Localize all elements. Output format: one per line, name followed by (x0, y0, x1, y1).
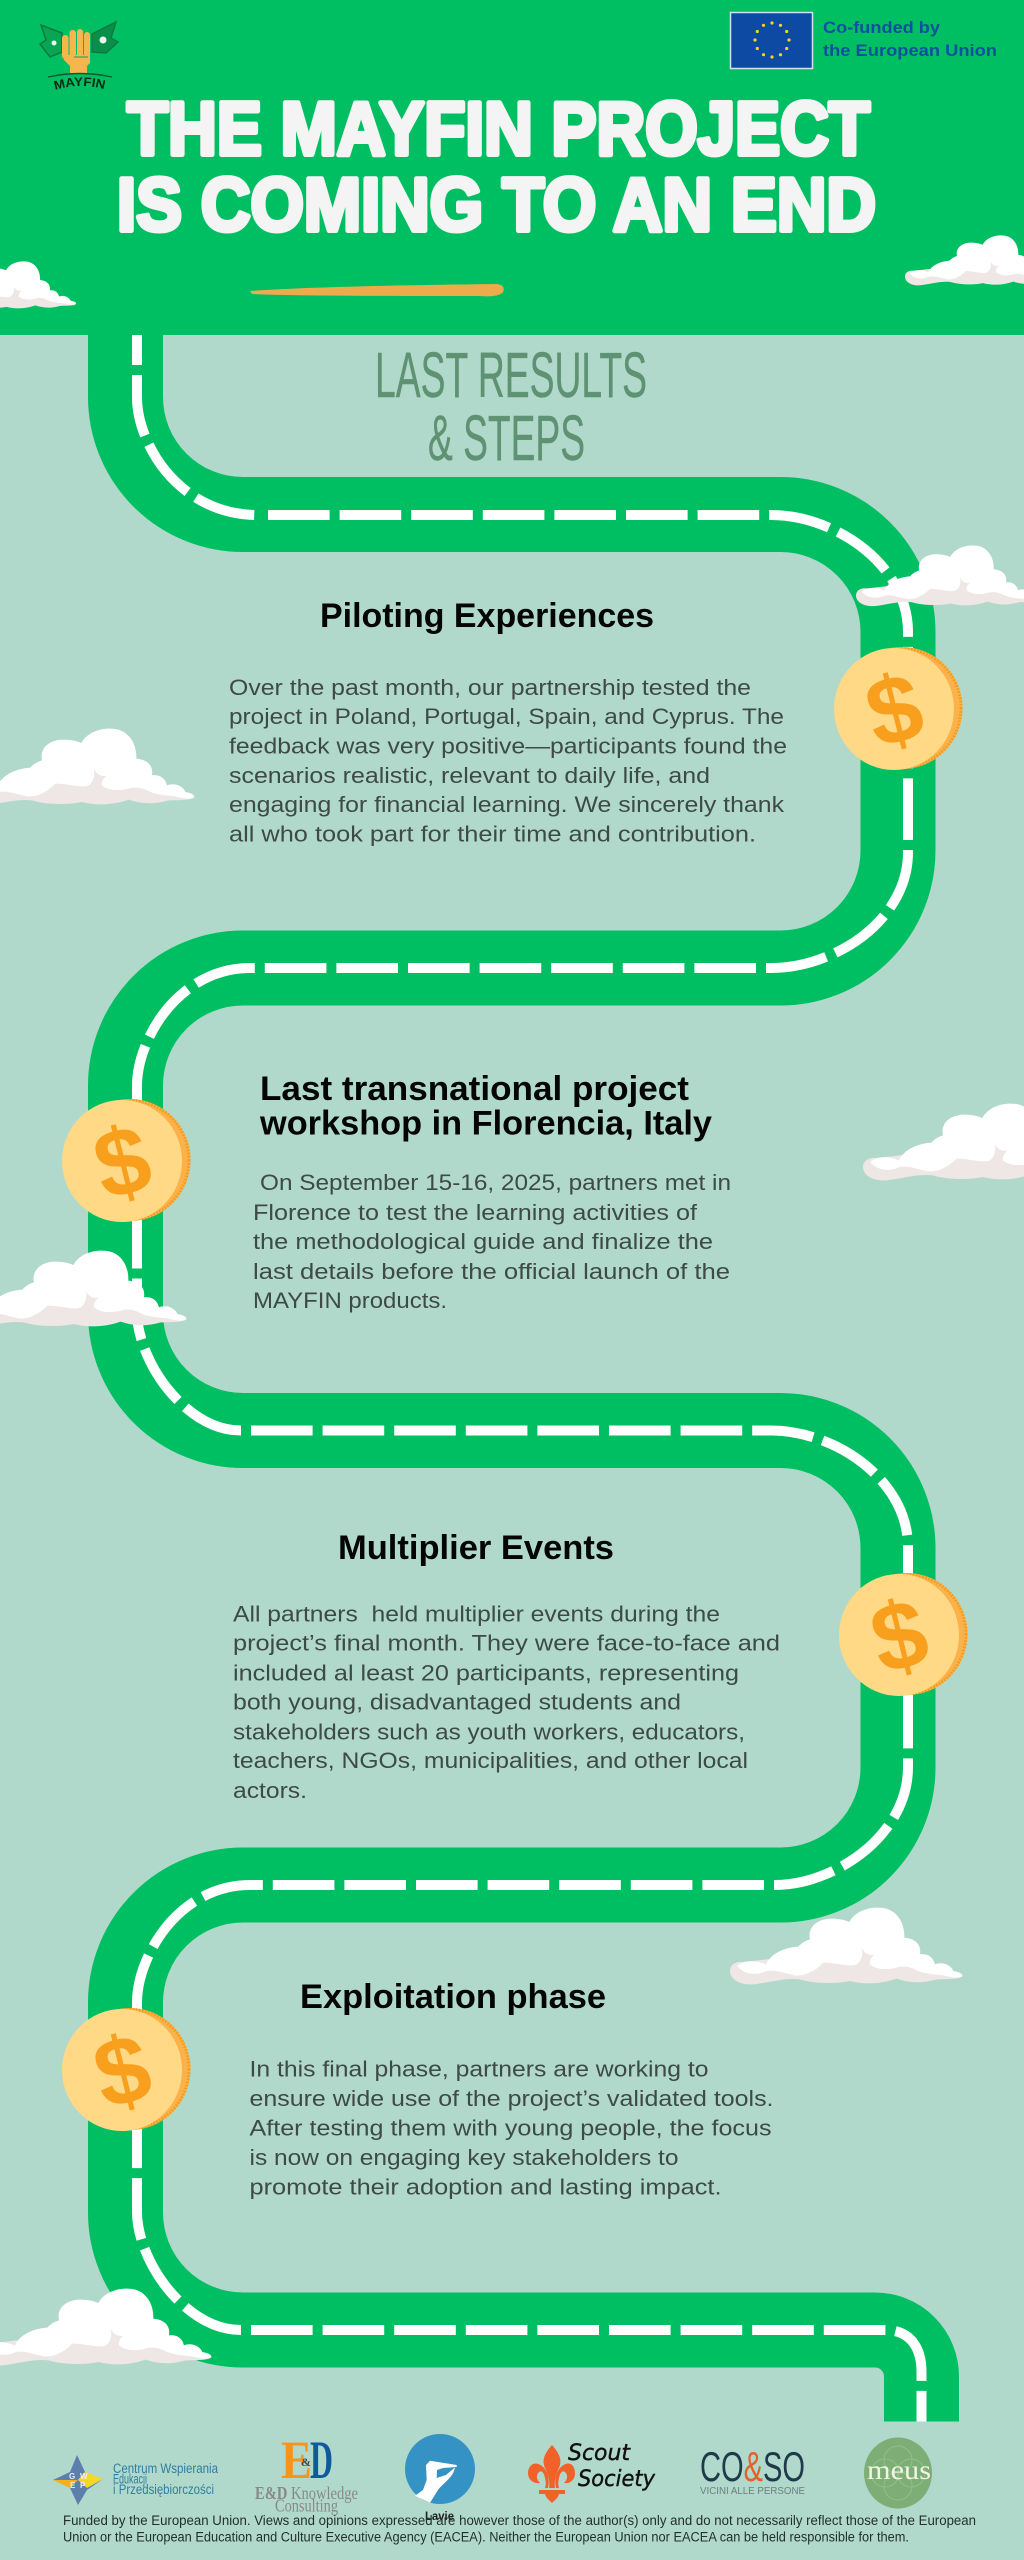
body text (229, 675, 787, 846)
body text: feedback was very positive—participants found the (229, 734, 787, 758)
logo: CWEP (53, 2455, 218, 2505)
body text: After testing them with young people, the focus (250, 2116, 772, 2140)
cloud: header right (905, 235, 1024, 285)
logo: CO&SO: VICINI ALLE PERSONE (700, 2485, 805, 2497)
body text: teachers, NGOs, municipalities, and other local (233, 1748, 748, 1773)
body text: scenarios realistic, relevant to daily life, and (229, 763, 710, 788)
logo: CO&SO: CO&SO (700, 2443, 805, 2490)
body text: is now on engaging key stakeholders to (250, 2145, 678, 2170)
logo: CWEP: i Przedsiębiorczości (113, 2482, 214, 2497)
body text: all who took part for their time and contribution. (229, 822, 756, 846)
panel: piloting experiences (229, 597, 787, 846)
logo: E&D Knowledge Consulting: Consulting (275, 2496, 338, 2516)
subtitle (375, 339, 647, 474)
logo: CWEP: P (80, 2481, 86, 2490)
logo: CWEP: G (69, 2472, 75, 2481)
coin: exploitation (62, 2008, 190, 2131)
panel: multiplier events (233, 1529, 780, 1803)
logo: MAYFIN (39, 20, 120, 90)
partner logos (53, 2430, 932, 2523)
body text: MAYFIN products. (253, 1288, 447, 1313)
logo: Lavie circle: Lavie (425, 2509, 454, 2523)
logo: CWEP: Edukacji (113, 2472, 147, 2486)
coin: workshop: $ (84, 1104, 161, 1221)
body text: On September 15-16, 2025, partners met in (260, 1170, 731, 1195)
cloud: right of workshop (863, 1104, 1024, 1180)
logo: Scout Society: Scout (568, 2441, 631, 2466)
logo: E&D Knowledge Consulting: & (301, 2455, 311, 2469)
EU co-funding badge (730, 12, 997, 68)
body text: stakeholders such as youth workers, educators, (233, 1720, 745, 1744)
coin: workshop (62, 1099, 190, 1222)
logo: Scout Society (528, 2441, 656, 2503)
logo: E&D Knowledge Consulting: D (310, 2430, 333, 2490)
body text (250, 2056, 774, 2200)
body text: actors. (233, 1778, 307, 1803)
body text: ensure wide use of the project’s validated tools. (250, 2086, 774, 2111)
co-funded text: the European Union (823, 41, 997, 60)
funding disclaimer (63, 2513, 976, 2544)
body text: project’s final month. They were face-to-face and (233, 1630, 780, 1656)
icon: fist (62, 29, 90, 73)
panel: exploitation phase (250, 1978, 774, 2200)
road surface (126, 333, 922, 2422)
logo: meus circle (864, 2438, 932, 2508)
logo: E&D Knowledge Consulting: E&D Knowledge (255, 2483, 358, 2503)
arc under fist (48, 74, 112, 77)
body text: Over the past month, our partnership tested the (229, 675, 751, 700)
title: THE MAYFIN PROJECT (127, 86, 870, 170)
funding disclaimer: Union or the European Education and Culture Executive Agency (EACEA). Neither the European Union nor EACEA can be held responsible for them. (63, 2530, 909, 2544)
body text: both young, disadvantaged students and (233, 1690, 681, 1714)
title (117, 86, 876, 246)
logo: CWEP: Centrum Wspierania (113, 2461, 218, 2476)
logo: Lavie circle (405, 2434, 475, 2523)
body text: the methodological guide and finalize the (253, 1229, 713, 1254)
icon: banknote wings (40, 22, 118, 57)
body text: engaging for financial learning. We sincerely thank (229, 792, 785, 817)
co-funded text: Co-funded by (823, 18, 941, 37)
cloud: lower left (0, 2289, 212, 2365)
road centre dashes (137, 335, 922, 2422)
coin: multiplier events (839, 1573, 968, 1696)
coin: exploitation: $ (84, 2013, 161, 2130)
coin: multiplier events: $ (861, 1578, 938, 1695)
body text: Florence to test the learning activities of (253, 1200, 698, 1225)
cloud: road one right (856, 545, 1024, 606)
funding disclaimer: Funded by the European Union. Views and opinions expressed are however those of the author(s) only and do not necessarily reflect those of the European (63, 2513, 976, 2528)
body text: last details before the official launch of the (253, 1259, 730, 1284)
cloud: under road right (730, 1908, 963, 1984)
logo: E&D Knowledge Consulting: E (281, 2430, 312, 2490)
heading: Multiplier Events (338, 1529, 614, 1567)
panel: last transnational workshop (253, 1070, 731, 1313)
heading: Exploitation phase (300, 1978, 606, 2016)
logo: Scout Society: Society (578, 2467, 656, 2492)
heading (259, 1070, 712, 1142)
EU flag (730, 12, 812, 68)
header band (0, 0, 1024, 335)
coin: piloting (834, 647, 962, 770)
cloud: over road left (0, 1251, 187, 1327)
logo: CWEP: W (80, 2472, 88, 2481)
body text (253, 1170, 731, 1313)
winding road (126, 333, 922, 2422)
heading: workshop in Florencia, Italy (259, 1104, 712, 1142)
body text: included al least 20 participants, representing (233, 1660, 739, 1686)
logo: meus circle: meus (867, 2455, 931, 2485)
body text: promote their adoption and lasting impact. (250, 2174, 722, 2200)
cloud: beside piloting text (0, 729, 195, 805)
body text: In this final phase, partners are working to (250, 2056, 708, 2082)
cloud: header left (0, 261, 76, 309)
orange brush stroke (250, 284, 504, 296)
subtitle: & STEPS (428, 402, 585, 474)
body text (233, 1602, 780, 1803)
body text: All partners held multiplier events during the (233, 1602, 720, 1626)
heading: Last transnational project (260, 1070, 689, 1108)
subtitle: LAST RESULTS (375, 339, 647, 411)
coin: piloting: $ (856, 652, 933, 769)
logo: CWEP: E (70, 2481, 76, 2490)
logo wordmark: MAYFIN (54, 77, 106, 90)
title: IS COMING TO AN END (117, 162, 876, 246)
body text: project in Poland, Portugal, Spain, and Cyprus. The (229, 704, 784, 729)
logo: E&D Knowledge Consulting (255, 2430, 358, 2516)
heading: Piloting Experiences (320, 597, 654, 635)
